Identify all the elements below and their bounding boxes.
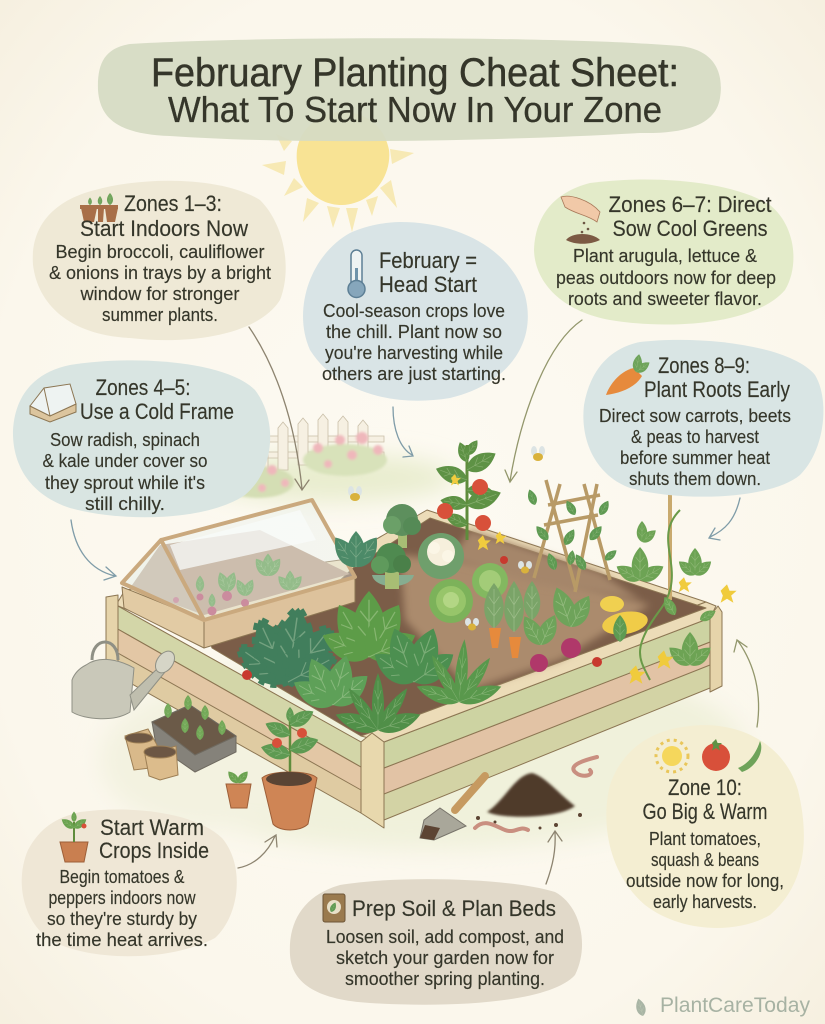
heading: February =: [379, 248, 477, 273]
panel: zones 6-7: [534, 179, 793, 325]
body text: [599, 406, 791, 489]
body text: early harvests.: [653, 892, 757, 912]
seed tray: [152, 695, 236, 772]
panel: zone 10: [606, 725, 804, 928]
arugula second: [414, 639, 504, 709]
panel: start warm crops inside: Crops Inside: [99, 838, 209, 863]
icon: watermark leaf: [634, 997, 647, 1017]
arrow: february: [393, 407, 413, 457]
left wall: [116, 605, 361, 813]
cauliflower: [418, 533, 464, 579]
body text: [42, 430, 208, 514]
heading: Zones 6–7: Direct: [608, 192, 772, 217]
body text: the time heat arrives.: [36, 930, 208, 950]
body text: shuts them down.: [629, 469, 761, 489]
panel: zones 8-9: [583, 340, 823, 497]
worms: [475, 757, 597, 831]
body text: [322, 301, 506, 384]
panel: february head start: Head Start: [379, 272, 477, 297]
soil: [204, 518, 706, 736]
bees and ladybugs: [242, 446, 602, 680]
body text: so they're sturdy by: [47, 909, 197, 929]
beets: [517, 584, 597, 672]
garden scene: [72, 414, 737, 840]
title line 2: What To Start Now In Your Zone: [168, 89, 662, 130]
heading: Zone 10:: [668, 775, 742, 800]
icon: compost bag: [323, 894, 345, 922]
panel: zones 4-5: Use a Cold Frame: [80, 399, 234, 424]
watering can: [72, 642, 178, 719]
frame base: [122, 587, 204, 648]
trellis and peas: [525, 480, 619, 592]
body text: window for stronger: [79, 284, 240, 304]
icon: tomato: [702, 739, 730, 771]
body text: Begin tomatoes &: [60, 867, 184, 887]
body text: they sprout while it's: [45, 473, 205, 493]
body text: smoother spring planting.: [345, 969, 545, 989]
body text: others are just starting.: [322, 364, 506, 384]
body text: before summer heat: [620, 448, 770, 468]
lettuce heads: [429, 563, 508, 623]
compost pile: [476, 773, 582, 830]
cold frame: [122, 500, 355, 648]
trowel: [420, 776, 485, 840]
body text: [49, 242, 271, 325]
icon: thermometer: [348, 250, 365, 298]
sun: [262, 112, 414, 232]
panel: february head start: [303, 222, 528, 401]
watermark text: PlantCareToday: [660, 994, 810, 1017]
arrow: zones 8-9: [709, 498, 740, 540]
body text: still chilly.: [85, 494, 165, 514]
body text: the chill. Plant now so: [326, 322, 502, 342]
arrows: [71, 320, 759, 884]
body text: Plant tomatoes,: [649, 829, 761, 849]
leaf lettuce: [288, 652, 375, 715]
body text: Direct sow carrots, beets: [599, 406, 791, 426]
arrow: zone 10: [734, 640, 759, 727]
lawn wash: [100, 454, 745, 850]
raised bed: [106, 510, 722, 828]
bed rim: [116, 510, 706, 730]
icon: cold frame: [30, 384, 76, 422]
glass lid: [122, 540, 204, 620]
body text: [326, 927, 564, 989]
arrow: zones 6-7: [505, 320, 582, 482]
body text: Cool-season crops love: [323, 301, 505, 321]
arrow: zones 4-5: [71, 520, 116, 580]
body text: [36, 867, 208, 950]
watermark: [634, 994, 810, 1017]
squash: [600, 596, 650, 642]
icon: carrot: [606, 353, 652, 395]
icon: seedling trays: [80, 193, 118, 222]
tomato plant: [433, 438, 507, 550]
collard greens: [328, 531, 384, 572]
heading: Zones 4–5:: [96, 375, 190, 400]
arrow: prep soil: [546, 831, 562, 884]
panel: zones 8-9: Plant Roots Early: [644, 377, 790, 402]
title line 1: February Planting Cheat Sheet:: [151, 51, 679, 95]
body text: squash & beans: [651, 850, 759, 870]
posts: [106, 595, 118, 676]
body text: peppers indoors now: [48, 888, 196, 908]
panel: zones 6-7: Sow Cool Greens: [612, 216, 768, 241]
arrow: start warm: [238, 835, 277, 868]
body text: roots and sweeter flavor.: [568, 289, 762, 309]
heading: Zones 1–3:: [124, 191, 222, 216]
climbing squash vine: [613, 490, 737, 684]
body text: Sow radish, spinach: [50, 430, 200, 450]
panel: zones 4-5: [13, 360, 270, 517]
icon: seedling pot: [60, 812, 88, 862]
icon: hand sowing seeds: [561, 196, 600, 244]
panel: start warm crops inside: [22, 809, 237, 956]
potted tomato: [259, 706, 321, 830]
body text: [556, 246, 776, 309]
body text: peas outdoors now for deep: [556, 268, 776, 288]
body text: Begin broccoli, cauliflower: [56, 242, 264, 262]
spinach second: [368, 624, 460, 692]
body text: Plant arugula, lettuce &: [573, 246, 757, 266]
body text: [626, 829, 784, 912]
seedlings inside: [173, 554, 305, 616]
small seedling pot: [225, 769, 251, 808]
peat pots: [125, 729, 178, 780]
arugula: [333, 673, 423, 738]
panel: prep soil: [290, 879, 582, 1005]
panel: zones 1-3: [33, 181, 286, 340]
title banner: [98, 38, 721, 141]
carrots: [484, 581, 540, 658]
body text: sketch your garden now for: [336, 948, 554, 968]
heading: Start Warm: [100, 815, 204, 840]
body text: & peas to harvest: [631, 427, 759, 447]
body text: & kale under cover so: [42, 451, 208, 471]
body text: summer plants.: [102, 305, 218, 325]
arrow: zones 1-3: [249, 327, 309, 490]
heading: Prep Soil & Plan Beds: [352, 896, 556, 921]
icon: sun: [656, 740, 688, 772]
body text: outside now for long,: [626, 871, 784, 891]
kale: [230, 605, 344, 694]
crops: [230, 438, 737, 738]
panel: zone 10: Go Big & Warm: [642, 799, 768, 824]
body text: Loosen soil, add compost, and: [326, 927, 564, 947]
fence and flowers: [222, 414, 387, 498]
heading: Zones 8–9:: [658, 353, 750, 378]
panel: zones 1-3: Start Indoors Now: [80, 216, 248, 241]
broccoli back: [383, 504, 421, 548]
spinach large: [317, 591, 421, 669]
icon: peas: [738, 741, 761, 772]
body text: you're harvesting while: [325, 343, 503, 363]
right wall: [384, 618, 710, 820]
body text: & onions in trays by a bright: [49, 263, 271, 283]
broccoli front: [371, 543, 414, 589]
